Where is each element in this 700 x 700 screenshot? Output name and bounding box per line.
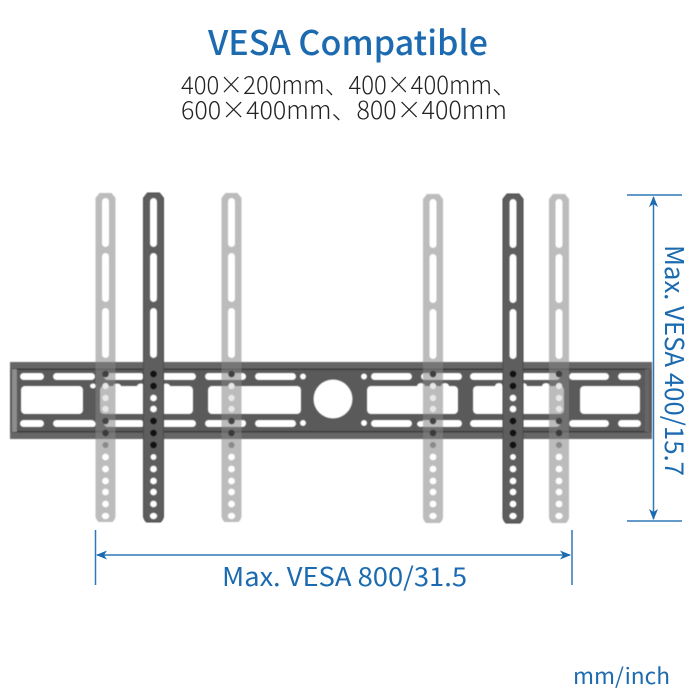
subtitle: compatible sizes: 400×200mm、400×400mm、 <box>181 66 516 102</box>
horizontal dimension arrow <box>96 530 572 585</box>
vertical dimension label: Max. VESA 400/15.7 <box>657 245 694 476</box>
vertical dimension arrow <box>627 195 682 521</box>
subtitle: compatible sizes: 600×400mm、800×400mm <box>181 91 507 127</box>
light bracket far left <box>96 193 116 522</box>
light bracket inner left <box>222 193 242 522</box>
unit note: mm/inch <box>573 659 670 691</box>
dark bracket left <box>144 193 164 522</box>
light bracket inner right <box>423 194 443 523</box>
center cable hole <box>314 380 352 418</box>
mounting rail <box>10 362 652 439</box>
light bracket far right <box>549 194 569 523</box>
horizontal dimension label: Max. VESA 800/31.5 <box>222 557 467 594</box>
title: VESA Compatible <box>207 16 488 65</box>
dark bracket right <box>503 194 523 523</box>
subtitle: compatible sizes <box>181 66 516 127</box>
